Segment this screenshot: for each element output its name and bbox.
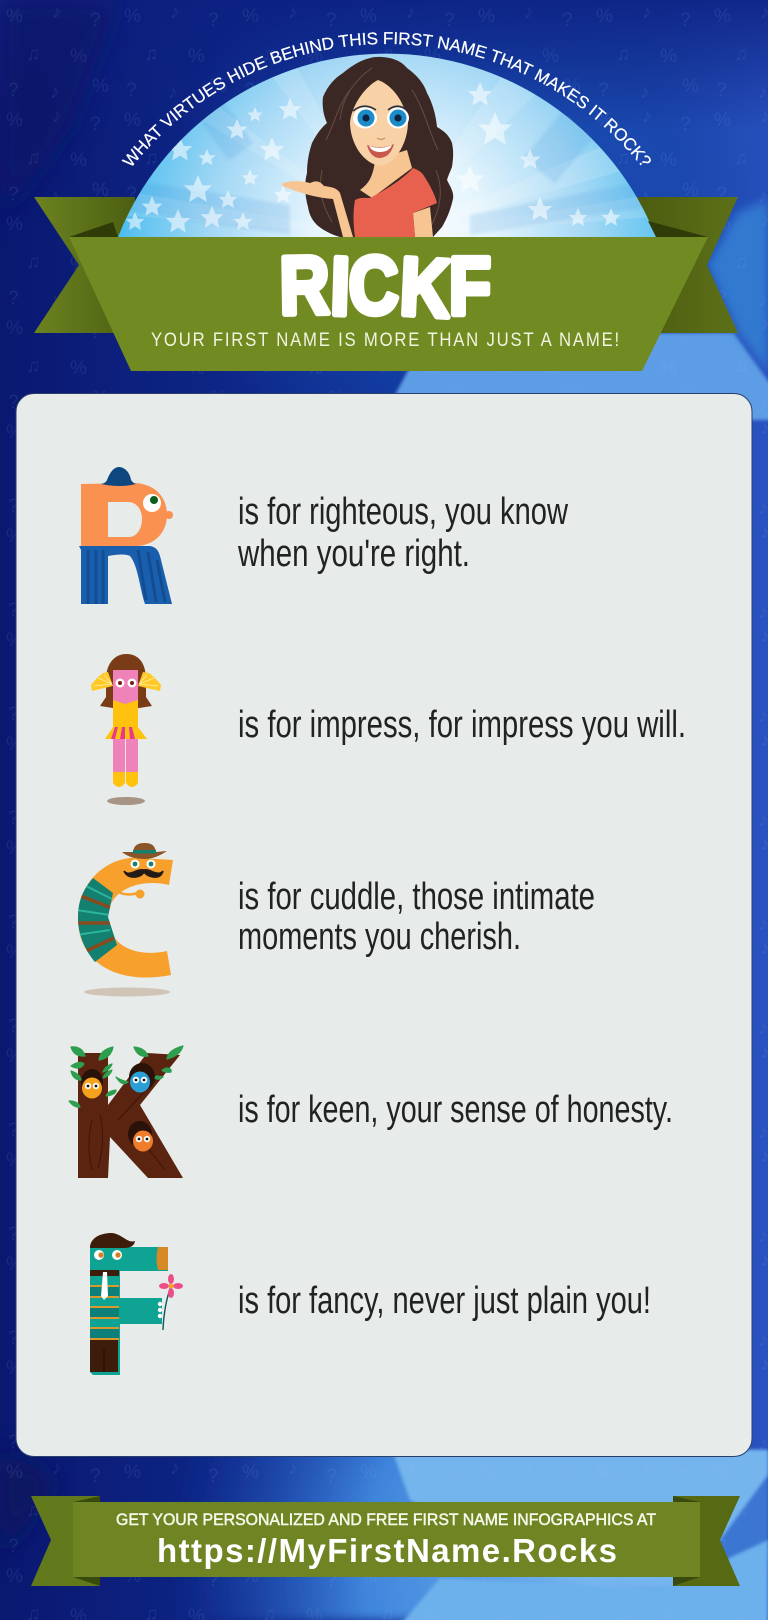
ribbon tail: left: [34, 197, 135, 333]
text: R meaning: when you're right.: [237, 533, 470, 575]
text: C meaning: moments you cherish.: [238, 916, 521, 958]
footer ribbon: [31, 1496, 740, 1586]
letter K illustration: [69, 1046, 183, 1178]
footer url: https://MyFirstName.Rocks: [157, 1532, 617, 1569]
letter R illustration: [79, 467, 173, 604]
tagline: YOUR FIRST NAME IS MORE THAN JUST A NAME!: [151, 329, 619, 350]
text: C meaning: [238, 876, 595, 958]
hair highlights: [320, 68, 440, 228]
red shirt: [354, 168, 437, 237]
main ribbon banner: [69, 237, 708, 371]
ribbon tail: right: [637, 197, 738, 333]
smile: [367, 144, 394, 158]
character: woman presenting: [282, 57, 453, 237]
sunburst dome with stars: [118, 50, 680, 237]
footer call to action: GET YOUR PERSONALIZED AND FREE FIRST NAME INFOGRAPHICS AT: [116, 1511, 656, 1529]
arms and chest: [282, 150, 433, 237]
letter F illustration: [90, 1233, 183, 1375]
text: R meaning: [237, 491, 568, 575]
text: F meaning: is for fancy, never just plain you!: [238, 1280, 651, 1322]
face: [350, 80, 408, 166]
panel: letter meanings: [16, 394, 752, 1456]
fold shadow: left: [69, 222, 118, 237]
text: R meaning: is for righteous, you know: [238, 491, 568, 533]
owls: [82, 1072, 153, 1152]
leaves: [69, 1046, 183, 1107]
letter C illustration: [70, 843, 173, 996]
arched heading: WHAT VIRTUES HIDE BEHIND THIS FIRST NAME THAT MAKES IT ROCK?: [122, 32, 651, 166]
letter I illustration: [91, 654, 161, 805]
eyes: [353, 106, 409, 128]
name title: RICKF: [279, 240, 491, 335]
text: C meaning: is for cuddle, those intimate: [238, 876, 595, 918]
fold shadow: right: [648, 221, 708, 237]
